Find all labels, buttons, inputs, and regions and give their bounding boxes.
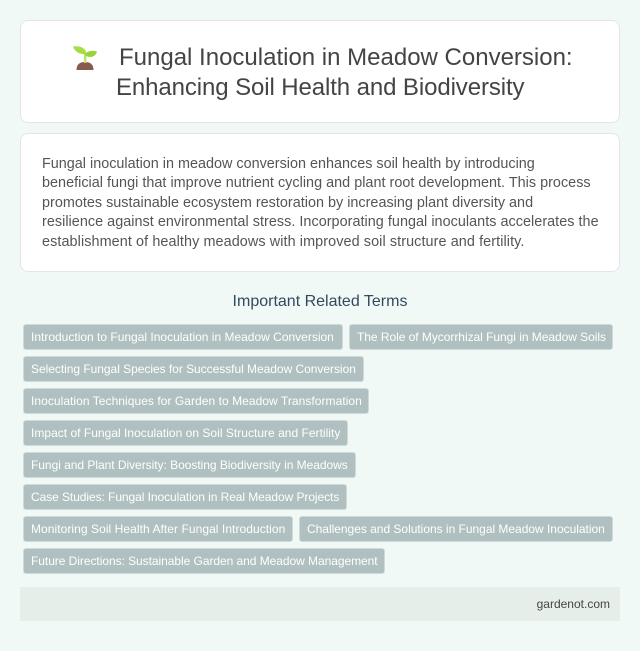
tag: Selecting Fungal Species for Successful Meadow Conversion [31,362,356,376]
panel: title card [20,20,620,123]
tag [349,324,613,350]
title [116,44,573,101]
tag [23,484,347,510]
summary paragraph: Fungal inoculation in meadow conversion enhances soil health by introducing [42,156,535,172]
tag [299,516,613,542]
tag: The Role of Mycorrhizal Fungi in Meadow Soils [357,330,606,344]
heading: related terms: Important Related Terms [233,293,407,310]
title: Fungal Inoculation in Meadow Conversion: [119,44,573,71]
tag: Case Studies: Fungal Inoculation in Real Meadow Projects [31,490,339,504]
tag [23,548,385,574]
panel: term tags [23,324,613,574]
summary paragraph: resilience against environmental stress. Incorporating fungal inoculants accelerates the [42,214,599,230]
tag: Fungi and Plant Diversity: Boosting Biodiversity in Meadows [31,458,348,472]
tag: Challenges and Solutions in Fungal Meadow Inoculation [307,522,605,536]
tag: Monitoring Soil Health After Fungal Introduction [31,522,285,536]
footer source text: gardenot.com [537,597,610,611]
summary paragraph: promotes sustainable ecosystem restoration by increasing plant diversity and [42,194,533,210]
panel: summary text [20,133,620,272]
tag: Impact of Fungal Inoculation on Soil Structure and Fertility [31,426,340,440]
tag [23,356,364,382]
title: Enhancing Soil Health and Biodiversity [116,74,524,101]
icon: seedling [73,46,97,70]
tag [23,324,343,350]
summary paragraph: beneficial fungi that improve nutrient cycling and plant root development. This process [42,175,591,191]
tag [23,516,293,542]
tag [23,420,348,446]
tag [23,452,356,478]
footer [20,587,620,621]
tag [23,388,369,414]
summary paragraph [42,156,599,250]
tag: Introduction to Fungal Inoculation in Meadow Conversion [31,330,334,344]
tag: Inoculation Techniques for Garden to Meadow Transformation [31,394,362,408]
tag: Future Directions: Sustainable Garden and Meadow Management [31,554,378,568]
summary paragraph: establishment of healthy meadows with improved soil structure and fertility. [42,234,524,250]
